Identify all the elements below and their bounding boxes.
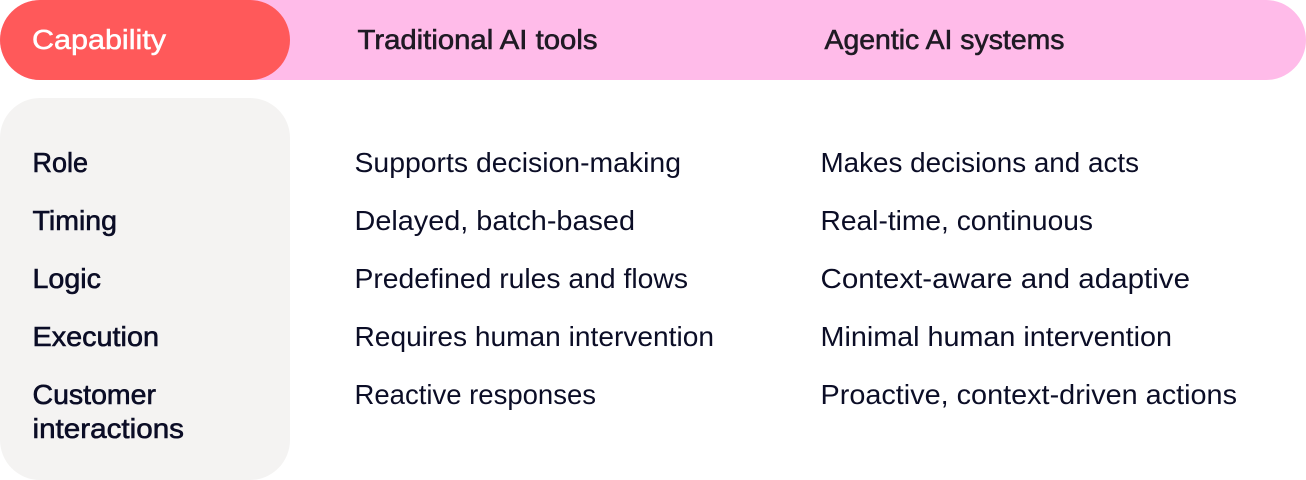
header cell: Capability: Capability bbox=[32, 24, 166, 55]
column: Agentic AI systems bbox=[820, 147, 1237, 410]
header background: pink pill bbox=[0, 0, 1306, 80]
label: Role: Role bbox=[32, 147, 88, 178]
cell: execution, agentic: Minimal human intervention bbox=[820, 321, 1172, 352]
cell: role, traditional: Supports decision-making bbox=[354, 147, 681, 178]
label: Execution: Execution bbox=[32, 321, 159, 352]
cell: execution, traditional: Requires human intervention bbox=[354, 321, 714, 352]
cell: logic, traditional: Predefined rules and flows bbox=[354, 263, 688, 294]
column: Traditional AI tools bbox=[354, 147, 714, 410]
column heading: Traditional AI tools: Traditional AI tools bbox=[358, 24, 598, 55]
cell: customer interactions, traditional: Reactive responses bbox=[354, 379, 596, 410]
panel: capability row labels bbox=[0, 98, 290, 480]
cell: customer interactions, agentic: Proactive, context-driven actions bbox=[820, 379, 1237, 410]
label: Logic: Logic bbox=[32, 263, 101, 294]
cell: role, agentic: Makes decisions and acts bbox=[820, 147, 1139, 178]
panel background bbox=[0, 98, 290, 480]
header bar bbox=[0, 0, 1306, 80]
label: Timing: Timing bbox=[32, 205, 117, 236]
cell: timing, traditional: Delayed, batch-based bbox=[354, 205, 635, 236]
column heading: Agentic AI systems: Agentic AI systems bbox=[824, 24, 1064, 55]
cell: timing, agentic: Real-time, continuous bbox=[820, 205, 1093, 236]
header cell: Capability bbox=[0, 0, 290, 80]
label: Customer interactions: Customer bbox=[32, 379, 156, 410]
label: Customer interactions: interactions bbox=[32, 413, 184, 444]
label: Customer interactions bbox=[32, 379, 184, 444]
cell: logic, agentic: Context-aware and adaptive bbox=[820, 263, 1190, 294]
